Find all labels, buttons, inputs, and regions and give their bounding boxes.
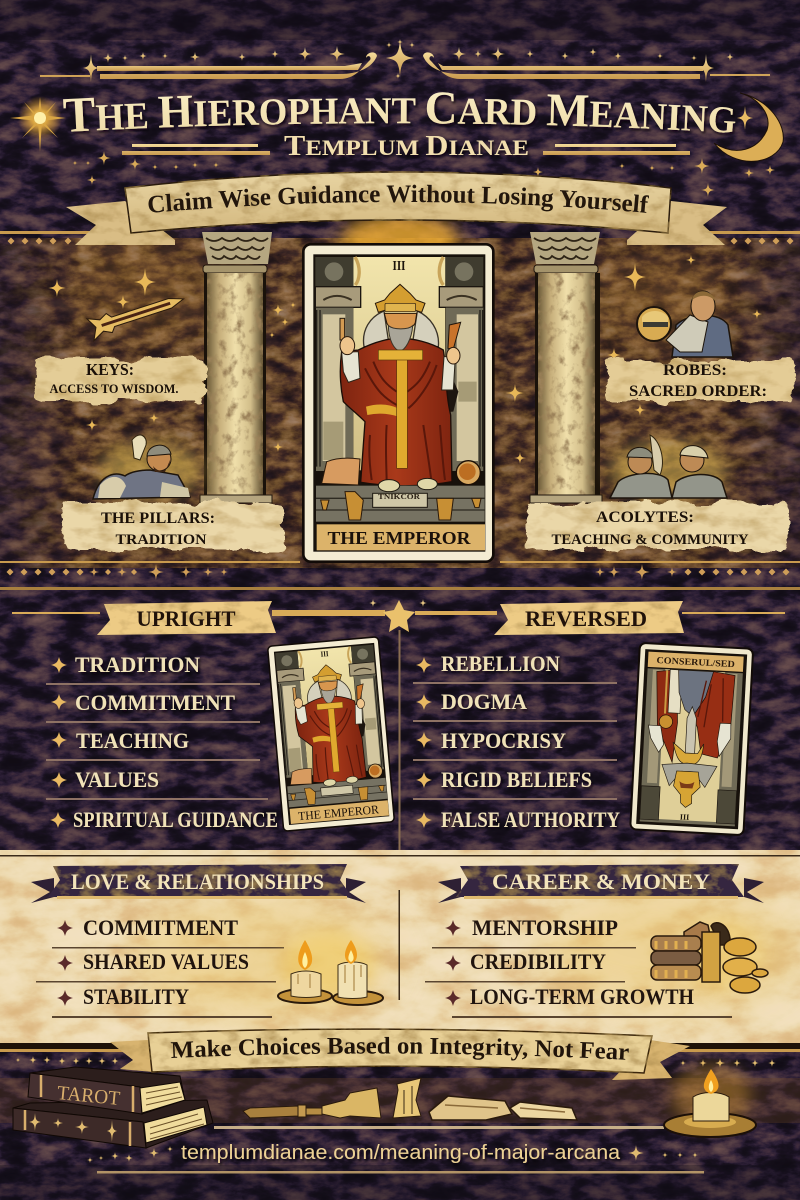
section header: reversed [415,601,785,635]
small upright card: III [320,649,329,659]
small upright card: THE EMPEROR [298,802,380,823]
section header: reversed: REVERSED [525,606,647,631]
list: love keywords: SHARED VALUES [83,949,249,974]
bottom dark band [0,1043,800,1068]
icon: sun [10,96,66,152]
illustration: acolytes [608,435,728,500]
plaque: robes: ROBES: [663,362,727,379]
small upright card [268,637,394,831]
subtitle: Templum Dianae: TEMPLUM DIANAE [284,131,529,162]
main card: The Emperor: TNIKCOR [378,493,421,501]
plaque: acolytes [526,502,788,550]
website url [87,1142,698,1164]
list: career keywords: CREDIBILITY [470,949,606,974]
icon: candles [278,931,383,1005]
icon: coins and ledger [651,921,768,993]
plaque: acolytes: ACOLYTES: [596,509,694,526]
right pillar [530,232,602,503]
illustration: robed figure with medallion [637,291,733,357]
icon: keys [87,288,187,341]
section header: upright [12,601,385,635]
bottom banner: Make Choices: Make Choices Based on Integrity, Not Fear [170,1036,629,1060]
list: love keywords: COMMITMENT [83,915,238,940]
title: THE HIEROPHANT CARD MEANING [63,92,737,136]
plaque: robes [606,360,794,401]
bottom banner: Make Choices [110,1028,690,1080]
plaque: keys [36,358,204,401]
small reversed card: CONSERUL/SED [656,656,735,670]
icon: crescent moon [714,93,783,161]
icon: stacked tarot books [13,1067,213,1148]
illustration: soldier figure [93,435,202,500]
list: upright keywords: TRADITION [75,652,200,677]
banner: love and relationships: LOVE & RELATIONSHIPS [71,869,324,894]
top banner: Claim Wise Guidance: Claim Wise Guidance Without Losing Yourself [148,184,649,213]
list: career keywords [425,915,732,1018]
plaque: acolytes: TEACHING & COMMUNITY [552,532,749,548]
list: upright keywords: TEACHING [76,728,189,753]
banner: career and money [438,864,764,903]
section header: upright: UPRIGHT [136,606,236,631]
small reversed card: III [680,812,689,822]
list: love keywords [36,915,284,1018]
main card: The Emperor: III [392,259,406,274]
gold glow and band rules [0,214,800,590]
main card: The Emperor [303,244,493,562]
top banner: Claim Wise Guidance [66,171,727,245]
list: reversed keywords: REBELLION [441,651,560,676]
left pillar [200,232,272,503]
list: reversed keywords: FALSE AUTHORITY [441,807,620,832]
list: reversed keywords [413,651,620,832]
rule above url [97,1126,704,1174]
list: love keywords: STABILITY [83,984,189,1009]
sparkle rows under the subtitle [72,151,775,197]
decorative header flourish [40,39,770,82]
plaque: the pillars: TRADITION [116,532,207,548]
main card: The Emperor: THE EMPEROR [328,528,472,548]
parchment panel [0,850,800,1044]
list: career keywords: LONG-TERM GROWTH [470,984,694,1009]
banner: love and relationships [31,864,366,903]
list: reversed keywords: HYPOCRISY [441,728,566,753]
small reversed card [630,643,753,835]
icon: stacked tarot books: TAROT [56,1082,121,1110]
plaque: keys: KEYS: [86,360,134,379]
plaque: keys: ACCESS TO WISDOM. [50,381,178,396]
plaque: the pillars [62,502,284,550]
website url: templumdianae.com/meaning-of-major-arcana [181,1142,621,1164]
list: reversed keywords: RIGID BELIEFS [441,767,592,792]
icon: bottom candle [664,1063,756,1137]
icon: open book [429,1096,577,1120]
icon: central star and divider [369,599,427,850]
subtitle: Templum Dianae [122,131,690,162]
icon: staff and column [243,1078,421,1118]
scattered middle stars [48,255,762,464]
list: reversed keywords: DOGMA [441,689,527,714]
banner: career and money: CAREER & MONEY [492,869,710,894]
list: career keywords: MENTORSHIP [472,915,618,940]
list: upright keywords [46,652,278,832]
plaque: the pillars: THE PILLARS: [101,510,215,527]
list: upright keywords: VALUES [75,767,159,792]
list: upright keywords: COMMITMENT [75,690,235,715]
list: upright keywords: SPIRITUAL GUIDANCE [73,807,278,832]
plaque: robes: SACRED ORDER: [629,383,767,400]
